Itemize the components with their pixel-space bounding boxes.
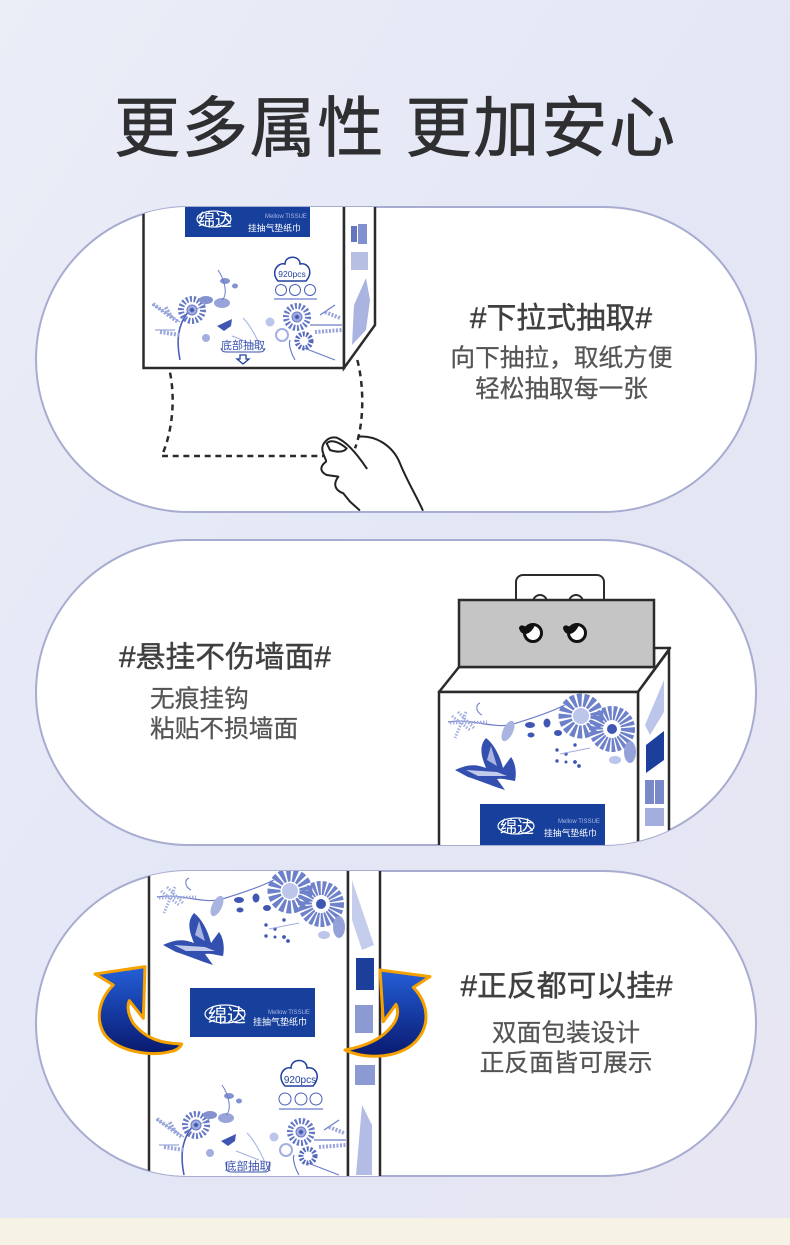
- 920pcs badge: [279, 1060, 323, 1110]
- blue brand label: Mellow TISSUE: [558, 819, 600, 825]
- 920pcs badge: 920pcs: [278, 269, 306, 279]
- heading: #悬挂不伤墙面#: [119, 641, 331, 674]
- side panel print: [352, 880, 375, 1175]
- bottom pull label: 底部抽取: [225, 1159, 271, 1173]
- description: 正反面皆可展示: [480, 1049, 652, 1077]
- panel background: [36, 540, 756, 845]
- blue brand label: Mellow TISSUE: [265, 214, 307, 220]
- panel background: [36, 871, 756, 1176]
- box side: [638, 650, 669, 850]
- icon: left curved arrow: [95, 967, 182, 1054]
- box side: [344, 200, 375, 368]
- gray card: [459, 600, 654, 667]
- box front: [149, 865, 348, 1185]
- description: 无痕挂钩: [150, 685, 249, 713]
- blue brand label: 绵达: [500, 818, 534, 837]
- blue brand label: Mellow TISSUE: [268, 1010, 310, 1016]
- blue brand label: 绵达: [208, 1005, 246, 1027]
- tissue box illustration: [144, 200, 375, 368]
- box front: [144, 200, 344, 368]
- description: [480, 1019, 652, 1077]
- description: [150, 685, 298, 743]
- description: 双面包装设计: [492, 1019, 640, 1047]
- bird: [455, 738, 516, 790]
- hanging box illustration: [439, 575, 670, 852]
- blue brand label: 绵达: [198, 211, 232, 230]
- blue brand label: 挂抽气垫纸巾: [248, 222, 301, 233]
- bird: [163, 913, 224, 965]
- floral print: [152, 270, 342, 360]
- bottom pull label: 底部抽取: [221, 338, 265, 352]
- floral print: [448, 700, 636, 768]
- heading: #下拉式抽取#: [470, 302, 652, 335]
- icon: right curved arrow: [345, 970, 430, 1056]
- blue brand label: [480, 804, 605, 849]
- panel: wall hanging: [36, 540, 756, 852]
- floral print: [157, 875, 345, 943]
- panel background: [36, 207, 756, 512]
- bottom pull label: [221, 338, 265, 364]
- bottom cream band: [0, 1218, 790, 1245]
- panel: double-sided hanging: [36, 865, 756, 1185]
- box illustration: [149, 865, 380, 1185]
- side panel print: [645, 680, 664, 826]
- box top: [439, 648, 670, 692]
- 920pcs badge: 920pcs: [284, 1075, 316, 1086]
- hook plate: [515, 574, 605, 599]
- description: [450, 344, 673, 403]
- 920pcs badge: [274, 257, 317, 300]
- panel: pull-down dispensing: [36, 200, 756, 512]
- dashed tissue outline: [162, 360, 362, 456]
- floral print lower: [156, 1085, 346, 1175]
- description: 粘贴不损墙面: [150, 715, 298, 743]
- hook holes: [520, 624, 586, 642]
- heading: #正反都可以挂#: [461, 970, 673, 1003]
- blue brand label: [185, 207, 310, 237]
- blue brand label: 挂抽气垫纸巾: [544, 827, 597, 838]
- description: 轻松抽取每一张: [475, 375, 648, 403]
- hand: [321, 437, 423, 510]
- side panel print: [351, 224, 370, 345]
- box side: [348, 865, 380, 1185]
- description: 向下抽拉，取纸方便: [450, 344, 673, 372]
- blue brand label: 挂抽气垫纸巾: [253, 1016, 307, 1027]
- blue brand label: [190, 988, 315, 1037]
- box front: [439, 692, 638, 852]
- title: 更多属性 更加安心: [114, 91, 675, 165]
